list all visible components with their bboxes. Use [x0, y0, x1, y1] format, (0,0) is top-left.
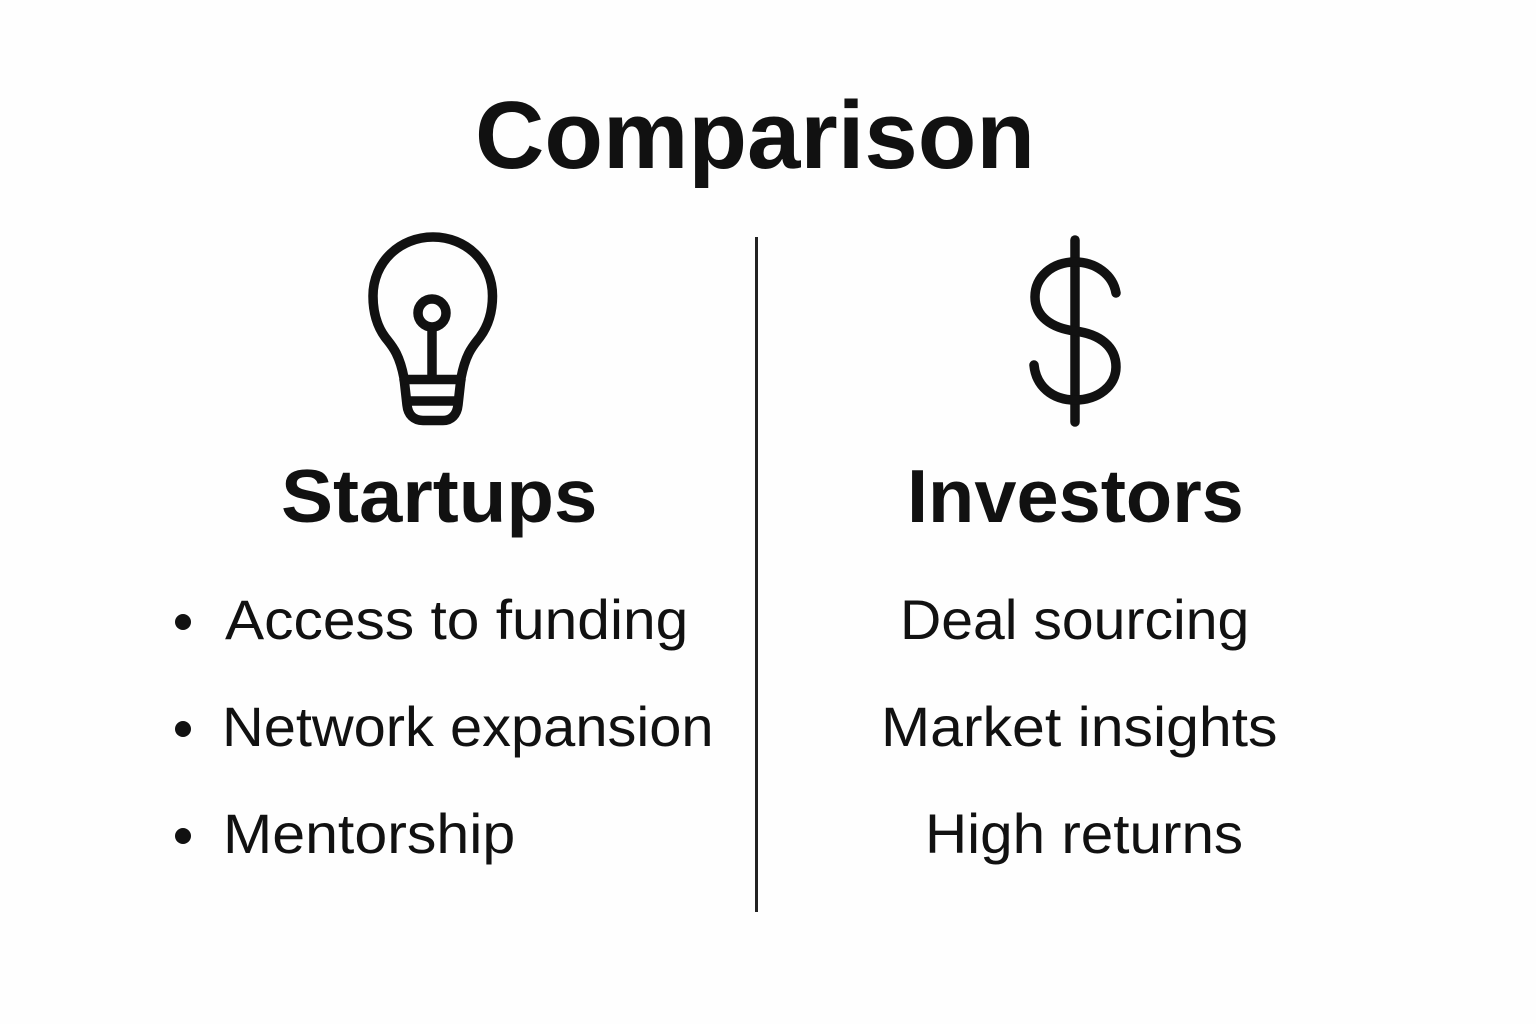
list item: network expansion: Network expansion [222, 695, 713, 758]
list item: market insights: Market insights [881, 695, 1278, 758]
icon: light bulb [368, 232, 498, 426]
title: Comparison [475, 82, 1035, 189]
icon: dollar sign [1029, 235, 1121, 427]
panel: startups [175, 232, 713, 865]
list item: deal sourcing: Deal sourcing [900, 588, 1249, 651]
list item: high returns: High returns [925, 802, 1243, 865]
list item: mentorship: Mentorship [223, 802, 515, 865]
divider line [755, 237, 758, 912]
panel: investors [881, 235, 1278, 865]
heading: startups: Startups [281, 454, 597, 538]
heading: investors: Investors [907, 454, 1244, 538]
list item: access to funding: Access to funding [225, 588, 688, 651]
